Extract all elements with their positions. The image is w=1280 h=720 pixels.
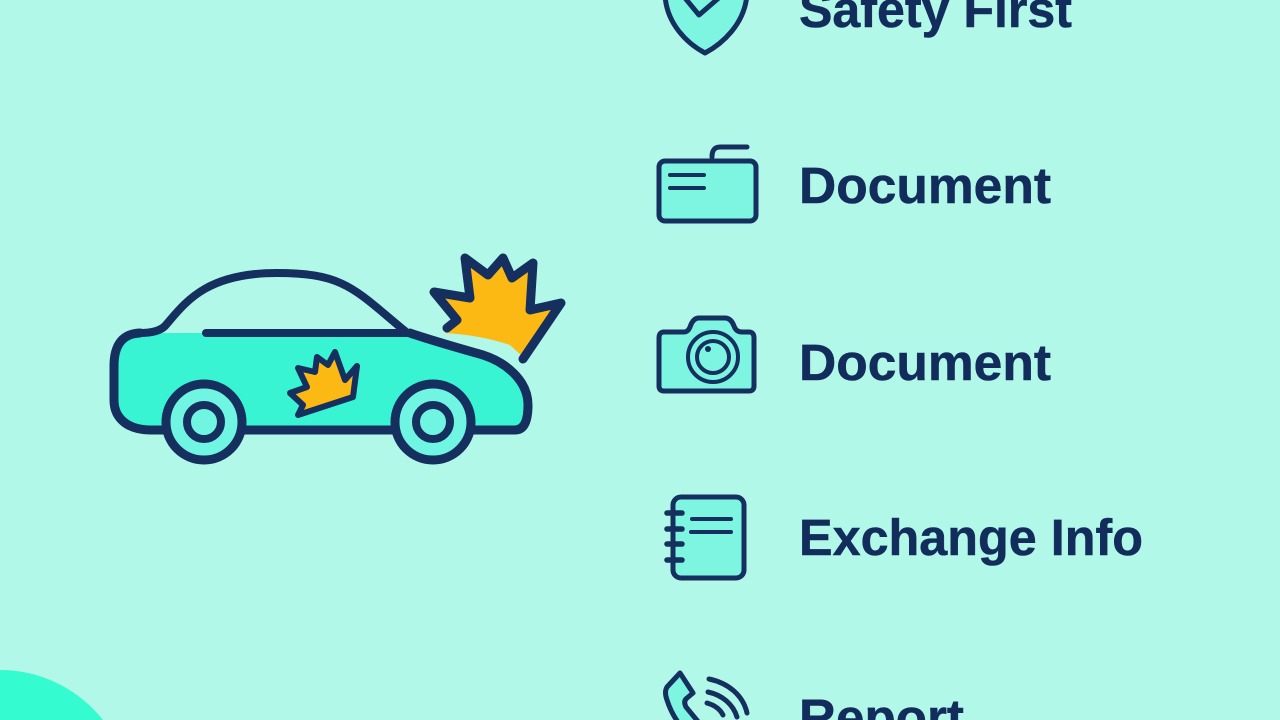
icon: crashed car — [114, 258, 561, 460]
decorative corner circle — [0, 670, 131, 720]
step: safety first — [665, 0, 1072, 53]
icon: phone with signal — [666, 673, 747, 720]
icon: notebook — [667, 497, 744, 578]
icon: folder — [659, 147, 756, 221]
label: Document — [799, 334, 1051, 391]
small burst on door — [290, 352, 357, 415]
car body — [114, 333, 528, 430]
big impact burst — [434, 258, 561, 359]
icon: camera — [659, 318, 754, 391]
label: Exchange Info — [799, 509, 1143, 566]
step: exchange info — [667, 497, 1143, 578]
step: document (camera) — [659, 318, 1051, 391]
step: report — [666, 673, 964, 720]
car roof and door line — [140, 273, 410, 333]
front wheel — [395, 384, 471, 460]
step: document (folder) — [659, 147, 1051, 221]
label: Document — [799, 157, 1051, 214]
icon: shield — [665, 0, 747, 53]
rear wheel — [166, 384, 242, 460]
